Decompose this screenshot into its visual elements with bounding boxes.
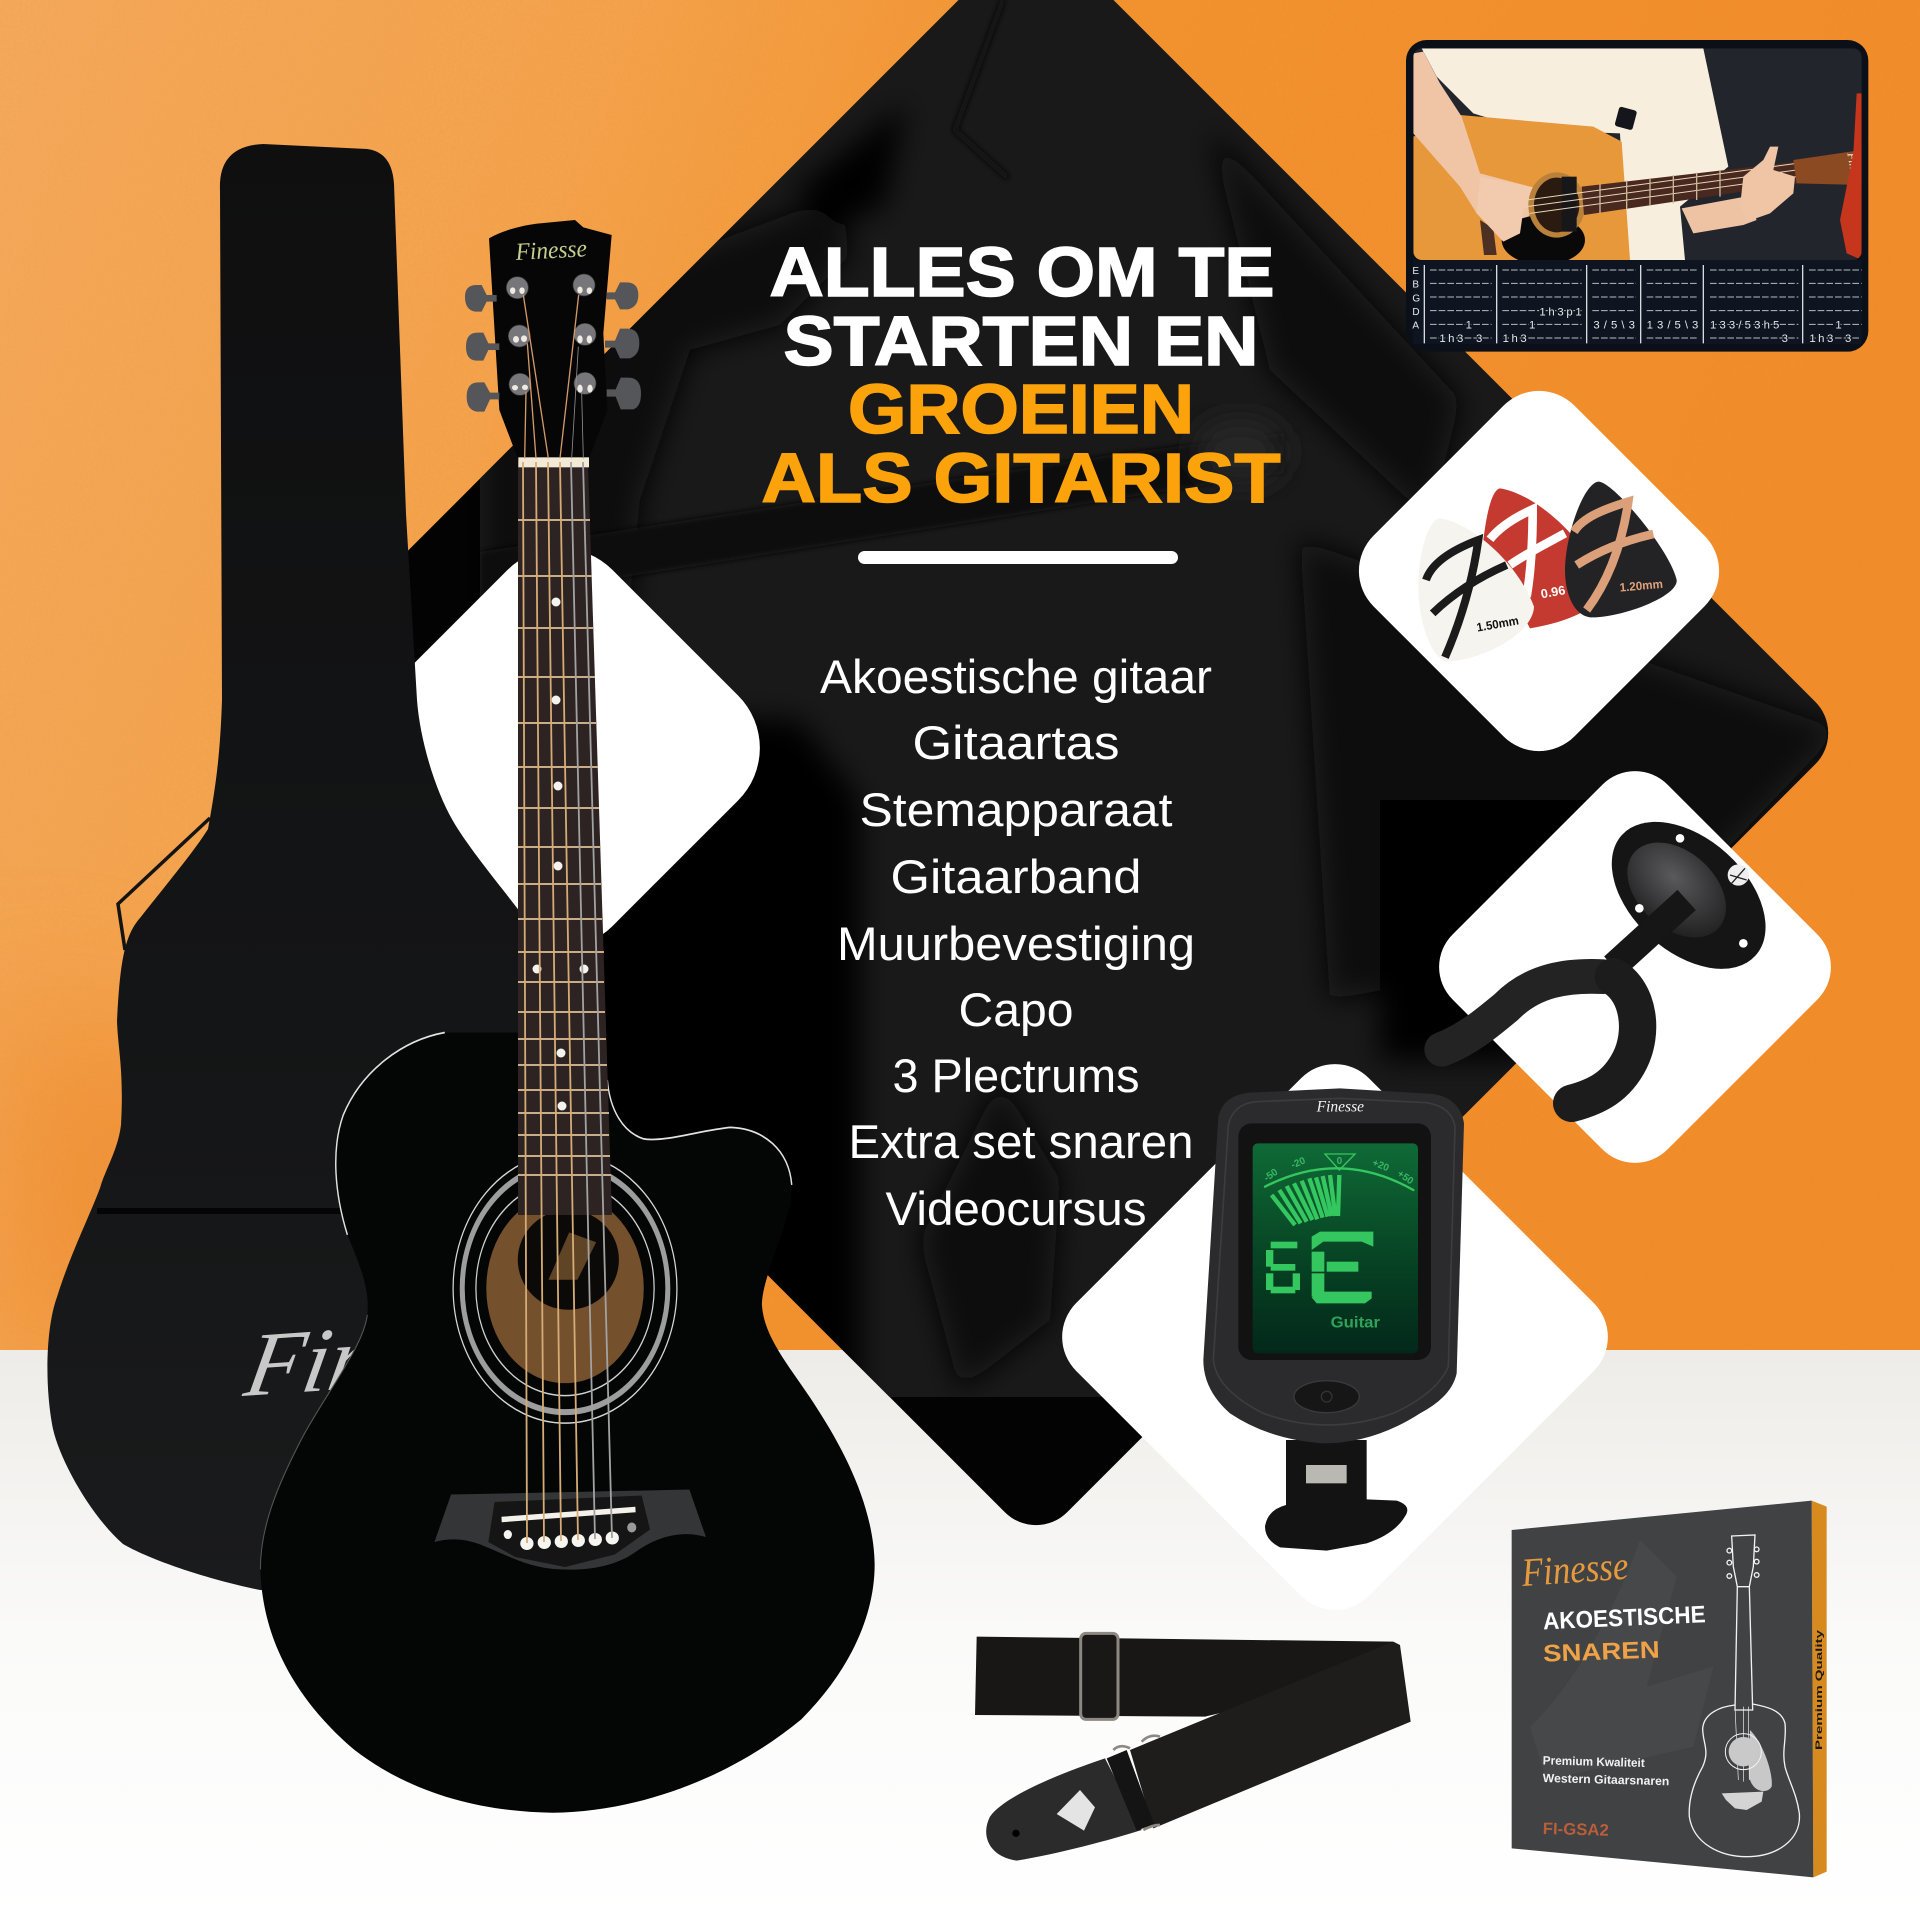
tab notation: D: [1412, 307, 1420, 318]
black diamond panel: [408, 0, 1828, 1526]
tab notation: G: [1412, 293, 1420, 304]
strings: [523, 462, 612, 1543]
bag carry strap: [118, 818, 210, 950]
strap leather end: [986, 1750, 1154, 1861]
box subtitle: Premium Kwaliteit: [1543, 1753, 1645, 1770]
tab notation: 1h3: [1809, 333, 1833, 345]
white pick: 1.50mm: [1475, 613, 1520, 635]
tab notation: 13/5\3: [1647, 319, 1698, 331]
gig bag: [47, 144, 542, 1595]
strap front band: [1130, 1642, 1411, 1828]
tuner note display: [1266, 1232, 1373, 1303]
box title: SNAREN: [1543, 1637, 1660, 1668]
product list: [820, 650, 1212, 1235]
wall texture: [0, 0, 1920, 1360]
product list: Akoestische gitaar: [820, 650, 1212, 703]
box side: [1812, 1501, 1827, 1877]
clip-on tuner: +20: [1371, 1158, 1391, 1174]
box subtitle: Western Gitaarsnaren: [1543, 1771, 1670, 1788]
guitar body: [260, 1033, 875, 1813]
title underline: [858, 551, 1178, 564]
tuner power button: [1294, 1381, 1359, 1413]
box title: AKOESTISCHE: [1542, 1601, 1706, 1635]
guitar strap: [975, 1633, 1411, 1861]
clip-on tuner: -20: [1290, 1155, 1308, 1171]
hook arm: [1613, 900, 1687, 967]
headstock logo: Finesse: [514, 235, 588, 266]
strap rear band: [975, 1637, 1393, 1717]
tab notation: 1h3: [1503, 333, 1527, 345]
red pick: [1483, 488, 1580, 628]
clip-on tuner: 0: [1337, 1156, 1343, 1167]
box title: [1542, 1601, 1706, 1668]
tab notation: 3: [1476, 333, 1482, 345]
product list: 3 Plectrums: [892, 1049, 1140, 1102]
product list: Gitaartas: [912, 716, 1120, 769]
clip-on tuner: +50: [1395, 1168, 1415, 1187]
tab notation: 1: [1835, 319, 1842, 331]
title: ALLES OM TE: [770, 233, 1274, 311]
title: ALS GITARIST: [762, 439, 1280, 517]
tab notation: A: [1412, 321, 1419, 332]
fret markers: [532, 598, 588, 1110]
clip-on tuner: [1203, 1088, 1464, 1551]
tab notation: 1: [1529, 319, 1535, 331]
wall hook: [1442, 793, 1793, 1103]
tuner logo: Finesse: [1316, 1099, 1364, 1116]
tuner meter: [1265, 1154, 1413, 1225]
tab notation: 3: [1782, 333, 1788, 345]
title: GROEIEN: [848, 370, 1194, 448]
tab notation: 133/53h5: [1710, 319, 1779, 331]
wall shadow band: [0, 1000, 300, 1350]
video still: Finesse: [1844, 150, 1865, 191]
hook left prong: [1442, 976, 1603, 1049]
product list: Muurbevestiging: [837, 917, 1195, 970]
tab notation: E: [1412, 266, 1419, 277]
box guitar drawing: [1689, 1535, 1799, 1857]
white diamond: tuner background: [1042, 1044, 1628, 1630]
strap slider: [1081, 1633, 1118, 1719]
product list: Extra set snaren: [848, 1115, 1194, 1168]
orange wall background: [0, 0, 1920, 1360]
hook right prong: [1572, 977, 1638, 1103]
product list: Capo: [958, 983, 1074, 1036]
frets: [518, 520, 611, 1175]
tab notation: 1h3p1: [1539, 306, 1582, 318]
red pick: 0.96: [1540, 583, 1566, 601]
hook mounting plate: [1584, 793, 1793, 998]
box logo: Finesse: [1519, 1543, 1630, 1595]
white diamond: wall hook background: [1420, 752, 1850, 1182]
white floor: [0, 1350, 1920, 1920]
strap buckles: [1113, 1736, 1160, 1830]
black pick: 1.20mm: [1619, 577, 1663, 595]
tab notation: B: [1412, 280, 1419, 291]
product list: Stemapparaat: [860, 783, 1172, 836]
background photo of guitarist: [480, 0, 1860, 1420]
box front: [1512, 1501, 1813, 1877]
tuning pegs: [506, 274, 596, 395]
product list: Gitaarband: [890, 850, 1142, 903]
tuner screen: [1238, 1123, 1431, 1360]
tuner clip mount: [1265, 1440, 1407, 1551]
tab notation: 1h3: [1439, 333, 1463, 345]
fretboard: [518, 462, 612, 1215]
video course tablet: [1406, 40, 1868, 352]
tab notation: 1: [1466, 319, 1472, 331]
video still: [1413, 48, 1865, 265]
headstock: [465, 220, 641, 467]
tab notation: 3: [1845, 333, 1851, 345]
black pick: [1565, 482, 1677, 617]
box subtitle: [1543, 1753, 1670, 1788]
bag zipper: [97, 1208, 345, 1214]
title: [762, 233, 1280, 517]
tuner body: [1203, 1088, 1464, 1443]
white diamond behind neck: [329, 517, 791, 979]
white diamond: picks background: [1338, 370, 1740, 772]
white pick: [1418, 518, 1534, 662]
bridge: [434, 1490, 706, 1570]
product list: Videocursus: [886, 1182, 1146, 1235]
box model code: FI-GSA2: [1543, 1819, 1609, 1840]
nut: [518, 457, 589, 467]
tablet frame: [1406, 40, 1868, 352]
clip-on tuner: -50: [1262, 1167, 1281, 1184]
box side: Premium Quality: [1814, 1630, 1824, 1750]
strings box: [1512, 1501, 1827, 1877]
tuner mode label: Guitar: [1331, 1314, 1380, 1331]
bag logo: Finesse: [237, 1296, 542, 1417]
title: STARTEN EN: [784, 302, 1258, 380]
tab notation: [1412, 260, 1862, 345]
acoustic guitar: [260, 220, 875, 1813]
picks: [1418, 482, 1677, 662]
tuning machines: [465, 282, 641, 412]
tab notation: 3/5\3: [1593, 319, 1635, 331]
